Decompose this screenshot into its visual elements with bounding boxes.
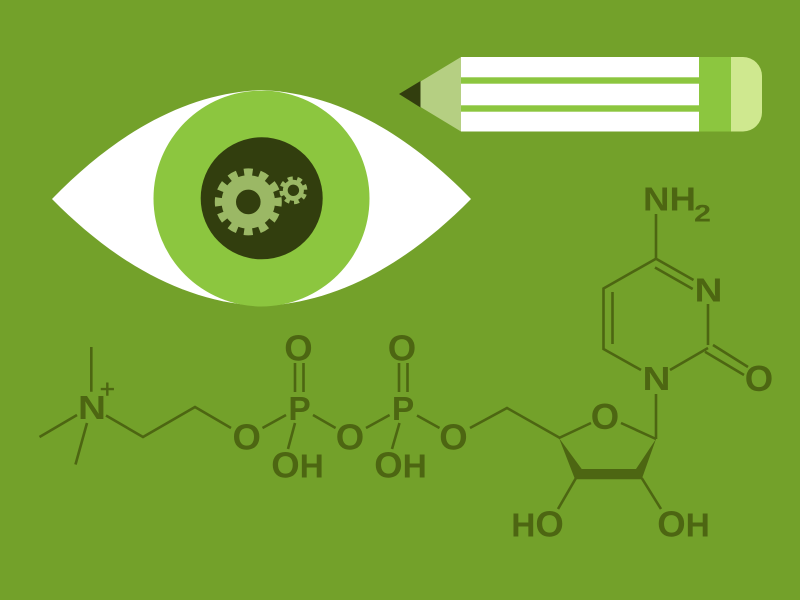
choline group: + — [100, 374, 115, 404]
icon: pencil — [399, 57, 762, 132]
first phosphate group: OH — [271, 444, 324, 486]
ribose ring: HO — [511, 504, 564, 544]
icon: eye with gears — [52, 90, 471, 306]
pencil ferrule — [699, 57, 731, 132]
second phosphate group: OH — [374, 444, 427, 486]
first phosphate group — [262, 328, 364, 486]
pencil eraser — [731, 57, 762, 132]
chemical structure: molecule — [40, 182, 773, 544]
first phosphate group: O — [336, 417, 364, 458]
cytosine ring: O — [745, 358, 773, 399]
cytosine ring: NH — [643, 182, 696, 219]
pupil — [201, 137, 323, 259]
ribose ring: OH — [657, 504, 710, 544]
cytosine ring: N — [642, 361, 670, 398]
first phosphate group: O — [284, 328, 313, 368]
second phosphate group — [366, 328, 560, 486]
choline group: N — [78, 390, 106, 427]
pencil body — [461, 57, 699, 132]
second phosphate group: P — [392, 391, 414, 428]
pencil wood cone — [420, 57, 461, 132]
iris — [154, 90, 370, 306]
icon: small gear — [277, 174, 310, 207]
first phosphate group: P — [288, 391, 311, 428]
cytosine ring — [604, 182, 773, 439]
ribose ring — [511, 396, 710, 544]
ribose ring: O — [591, 396, 619, 437]
cytosine ring: N — [694, 273, 722, 310]
cytosine ring: 2 — [694, 201, 711, 228]
second phosphate group: O — [388, 328, 416, 368]
icon: large gear — [219, 172, 278, 231]
pencil lead tip — [399, 81, 420, 108]
choline group: O — [232, 417, 261, 458]
choline group — [40, 347, 261, 464]
eye white — [52, 90, 471, 306]
second phosphate group: O — [439, 417, 468, 458]
